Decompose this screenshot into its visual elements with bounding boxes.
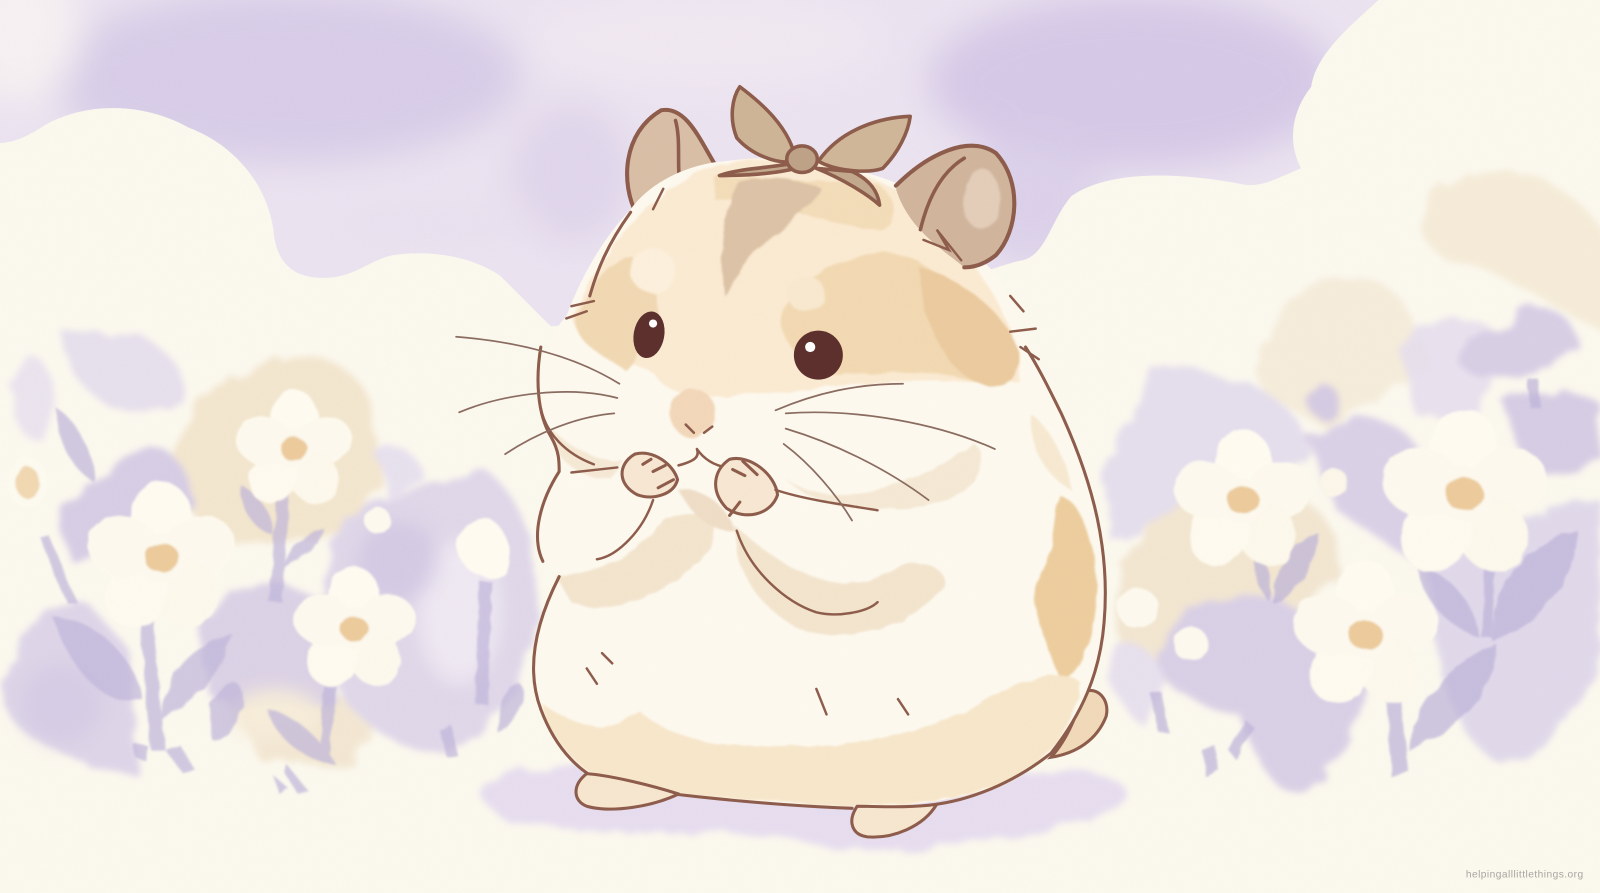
arm and chest shadows (735, 526, 944, 635)
stems and leaves (1149, 378, 1578, 778)
tan washes behind flowers, right (1257, 171, 1600, 429)
left foot (576, 774, 679, 809)
lilac silhouettes (1102, 368, 1308, 541)
watermark: helpingalllittlethings.org (1466, 870, 1584, 881)
white flowers (7, 390, 510, 696)
tail (1051, 690, 1107, 757)
forehead streak (722, 179, 821, 298)
lilac sky (0, 0, 1429, 327)
right foot (852, 804, 937, 837)
paws (622, 453, 778, 515)
hamster (456, 87, 1107, 837)
sky washes (0, 0, 1337, 265)
left flower bed (4, 329, 536, 794)
lilac silhouettes (4, 602, 138, 776)
stems and leaves (39, 408, 522, 794)
tan wash (176, 357, 381, 541)
bow (719, 87, 910, 205)
arm fur lines (541, 189, 1039, 714)
head colour (571, 160, 1020, 396)
fur washes (543, 160, 1097, 806)
lower belly (543, 675, 1082, 806)
whiskers (456, 337, 995, 520)
lighter blooms in lilac wash (20, 520, 500, 745)
right flower bed (1102, 307, 1600, 796)
eyes (630, 309, 843, 380)
muzzle (670, 389, 715, 438)
side patch (1035, 495, 1097, 682)
left ear (627, 110, 714, 214)
body fill (533, 158, 1106, 806)
body outline (534, 212, 1105, 808)
right ear (896, 146, 1014, 267)
nose and mouth (679, 425, 727, 467)
ground shadow (483, 765, 1128, 852)
white flowers (1117, 410, 1555, 715)
